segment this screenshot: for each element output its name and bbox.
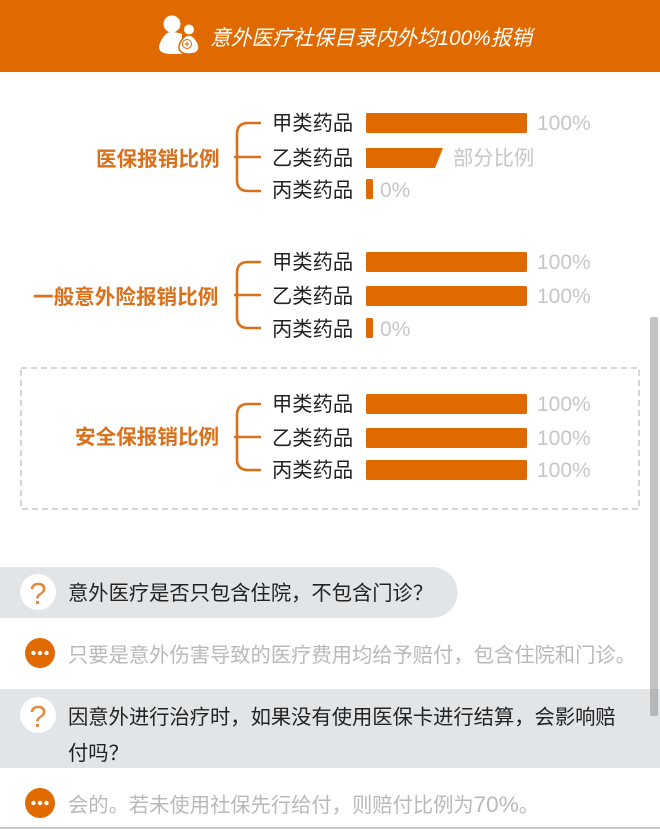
icon: question mark: ? <box>29 699 47 734</box>
answer 1: 只要是意外伤害导致的医疗费用均给予赔付，包含住院和门诊。 <box>68 644 636 667</box>
row: class C: 0% <box>380 318 410 341</box>
heading: 医保报销比例 <box>96 148 220 171</box>
row: class A: 甲类药品 <box>272 393 353 416</box>
bracket <box>234 404 261 470</box>
row: class B: 乙类药品 <box>272 147 353 170</box>
row: class A: 甲类药品 <box>272 112 353 135</box>
row: class C <box>272 179 410 202</box>
row: class A <box>272 112 591 135</box>
question 1: 意外医疗是否只包含住院，不包含门诊？ <box>68 582 433 605</box>
question 1 <box>0 567 458 618</box>
icon: question mark <box>20 697 56 734</box>
panel: medical insurance reimbursement <box>96 112 591 202</box>
icon: question mark <box>20 574 56 611</box>
row: class C: 丙类药品 <box>272 459 353 482</box>
row: class B: 乙类药品 <box>272 427 353 450</box>
row: class B: 100% <box>537 427 591 450</box>
row: class C: 丙类药品 <box>272 179 353 202</box>
bracket <box>234 262 261 328</box>
row: class C <box>272 318 410 341</box>
heading: 安全保报销比例 <box>75 425 219 449</box>
bracket <box>234 123 261 191</box>
row: class B <box>272 285 591 308</box>
scrollbar <box>650 317 658 716</box>
heading: 一般意外险报销比例 <box>33 285 218 309</box>
row: class A: 甲类药品 <box>272 251 353 274</box>
row: class C: 丙类药品 <box>272 318 353 341</box>
panel: general accident insurance reimbursement <box>33 251 591 341</box>
dashed frame <box>21 368 639 509</box>
icon: people with medical cross <box>159 16 199 54</box>
row: class A: 100% <box>537 393 591 416</box>
icon: speech dots <box>25 638 55 668</box>
row: class A: 100% <box>537 112 591 135</box>
bottom edge line <box>0 827 660 829</box>
row: class C <box>272 459 591 482</box>
header title: 意外医疗社保目录内外均100%报销 <box>210 27 536 50</box>
row: class A <box>272 393 591 416</box>
row: class B <box>272 427 591 450</box>
row: class C: 0% <box>380 179 410 202</box>
row: class B <box>272 147 534 170</box>
icon: speech dots <box>25 788 55 818</box>
row: class C: 100% <box>537 459 591 482</box>
row: class A <box>272 251 591 274</box>
panel: safety insurance reimbursement <box>21 368 639 509</box>
row: class B: 100% <box>537 285 591 308</box>
question 2: 付吗？ <box>68 742 129 765</box>
answer 2: 会的。若未使用社保先行给付，则赔付比例为70%。 <box>68 792 539 817</box>
icon: question mark: ? <box>29 576 47 611</box>
question 2 <box>0 689 660 768</box>
answer 1 <box>25 638 636 668</box>
row: class B: 乙类药品 <box>272 285 353 308</box>
row: class A: 100% <box>537 251 591 274</box>
header banner <box>0 0 660 72</box>
row: class B: 部分比例 <box>453 147 534 170</box>
question 2: 因意外进行治疗时，如果没有使用医保卡进行结算，会影响赔 <box>68 706 616 729</box>
